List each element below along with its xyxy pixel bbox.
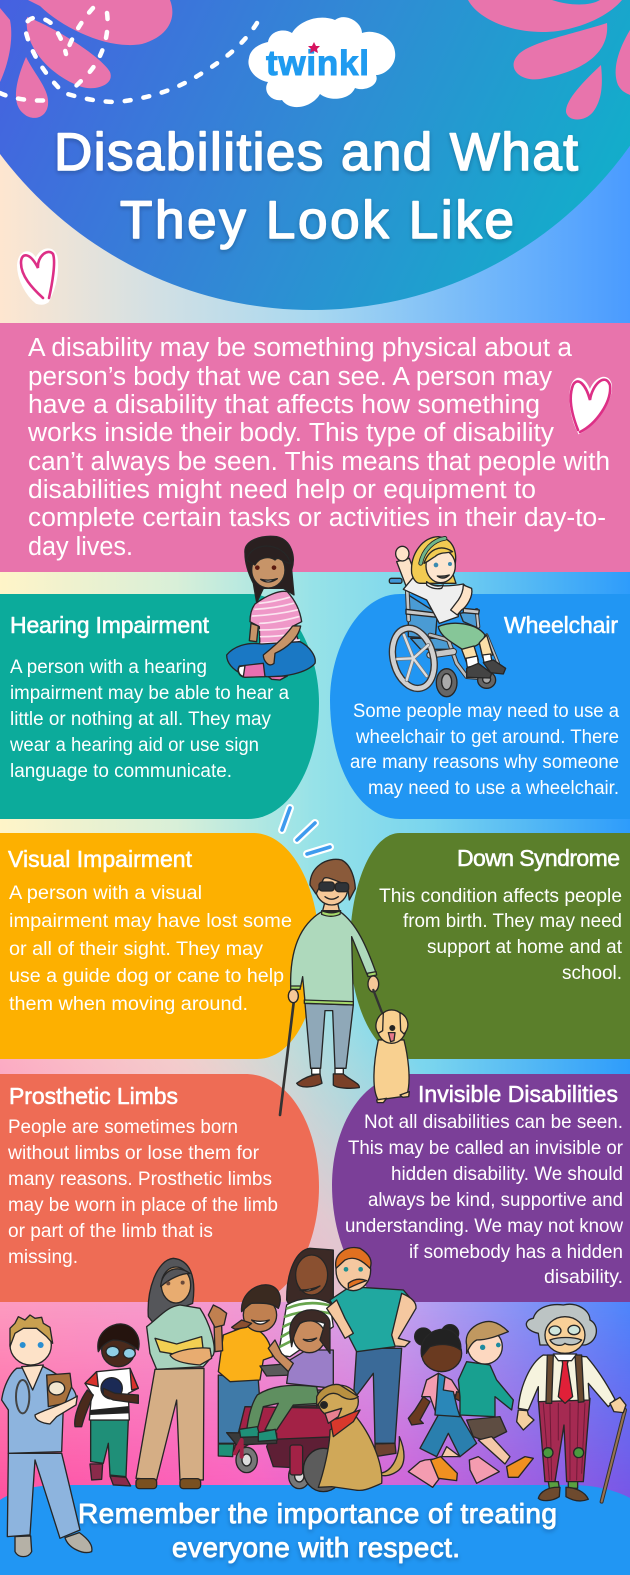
middle background [0, 572, 630, 1304]
panel: invisible disabilities: hidden disability. We should [391, 1164, 623, 1185]
motion rays [282, 808, 330, 854]
twinkl logo: twinkl [266, 44, 369, 83]
intro panel: works inside their body. This type of disability [27, 419, 554, 447]
panel: prosthetic limbs: or part of the limb that is [8, 1221, 213, 1242]
heart left outline [21, 252, 54, 298]
panel: visual impairment [0, 833, 319, 1059]
title: Disabilities and What [54, 123, 578, 182]
header background [0, 0, 630, 323]
heart left [19, 250, 56, 303]
panel: visual impairment: them when moving around. [9, 994, 248, 1015]
panel: invisible disabilities: always be kind, supportive and [368, 1190, 623, 1211]
panel: prosthetic limbs: may be worn in place of the limb [8, 1195, 278, 1216]
intro panel: have a disability that affects how something [28, 391, 540, 419]
panel: down syndrome: from birth. They may need [403, 911, 622, 932]
panel: hearing impairment [0, 594, 319, 819]
nurse [2, 1315, 92, 1557]
panel: invisible disabilities: Invisible Disabilities [418, 1081, 618, 1107]
panel: visual impairment: impairment may have lost some [9, 911, 292, 932]
closing message: Remember the importance of treating [78, 1498, 557, 1529]
panel: wheelchair: Wheelchair [504, 612, 618, 638]
panel: hearing impairment: impairment may be able to hear a [10, 683, 289, 704]
man in teal shirt [303, 1248, 416, 1492]
title [54, 123, 578, 250]
boy with glasses [75, 1324, 139, 1486]
panel: wheelchair [330, 594, 630, 819]
wheelchair user [227, 1310, 340, 1489]
twinkl logo [248, 17, 395, 107]
header circle [0, 0, 630, 310]
right flower decoration [468, 0, 630, 120]
heart right [570, 378, 611, 433]
panel: down syndrome [350, 833, 630, 1059]
intro panel [0, 323, 630, 572]
footer blue band [0, 1485, 630, 1575]
intro panel: disabilities might need help or equipment to [28, 476, 536, 504]
panel: down syndrome: school. [562, 963, 622, 984]
panel: hearing impairment: wear a hearing aid or use sign [9, 735, 259, 756]
closing message [78, 1498, 557, 1563]
panel: hearing impairment: A person with a hearing [10, 657, 207, 678]
panel: invisible disabilities: Not all disabilities can be seen. [364, 1112, 623, 1133]
girl walking with overalls [408, 1325, 499, 1487]
title: They Look Like [120, 191, 514, 250]
intro panel: day lives. [28, 533, 133, 561]
closing message: everyone with respect. [172, 1532, 460, 1563]
girl in striped top behind [278, 1248, 333, 1357]
panel: visual impairment: or all of their sight. They may [9, 939, 264, 960]
intro panel: complete certain tasks or activities in their day-to- [28, 504, 606, 532]
panel: wheelchair: may need to use a wheelchair. [368, 778, 619, 799]
illustration: girl in wheelchair [386, 537, 506, 697]
panel: visual impairment: use a guide dog or cane to help [9, 966, 284, 987]
panel: wheelchair: are many reasons why someone [350, 752, 619, 773]
illustration: man with cane and guide dog [280, 859, 409, 1115]
panel: down syndrome: support at home and at [427, 937, 623, 958]
boy in yellow top [208, 1285, 280, 1457]
intro panel: person’s body that we can see. A person may [28, 363, 552, 391]
left flower decoration [0, 0, 172, 118]
panel: hearing impairment: little or nothing at all. They may [10, 709, 271, 730]
panel: prosthetic limbs: without limbs or lose them for [7, 1143, 260, 1164]
illustration: group of people right [303, 1248, 626, 1502]
panel: prosthetic limbs: Prosthetic Limbs [9, 1083, 178, 1109]
footer background [0, 1302, 630, 1505]
boy walking [431, 1321, 533, 1481]
panel: invisible disabilities [332, 1074, 630, 1302]
panel: prosthetic limbs: many reasons. Prosthetic limbs [8, 1169, 272, 1190]
panel: invisible disabilities: understanding. We may not know [345, 1216, 623, 1237]
dog with bandana [317, 1384, 404, 1490]
panel: prosthetic limbs: missing. [8, 1247, 78, 1268]
panel: down syndrome: Down Syndrome [457, 845, 620, 871]
panel: prosthetic limbs: People are sometimes born [8, 1117, 238, 1138]
panel: invisible disabilities: disability. [544, 1267, 623, 1288]
panel: prosthetic limbs [0, 1074, 319, 1302]
panel: down syndrome: This condition affects people [379, 886, 622, 907]
panel: hearing impairment: language to communicate. [10, 761, 232, 782]
panel: wheelchair: Some people may need to use a [353, 701, 619, 722]
panel: wheelchair: wheelchair to get around. There [355, 727, 619, 748]
dashed flight line [0, 8, 257, 102]
panel: hearing impairment: Hearing Impairment [10, 612, 210, 638]
illustration: seated girl [227, 536, 315, 680]
old man with cane [517, 1304, 626, 1502]
panel: visual impairment: Visual Impairment [8, 846, 193, 872]
illustration: group of people left [2, 1248, 340, 1557]
intro panel: A disability may be something physical about a [28, 334, 573, 362]
intro panel: can’t always be seen. This means that people with [28, 448, 610, 476]
panel: visual impairment: A person with a visual [9, 883, 202, 904]
panel: invisible disabilities: This may be called an invisible or [348, 1138, 624, 1159]
panel: invisible disabilities: if somebody has a hidden [409, 1242, 623, 1263]
woman with book [136, 1258, 214, 1489]
